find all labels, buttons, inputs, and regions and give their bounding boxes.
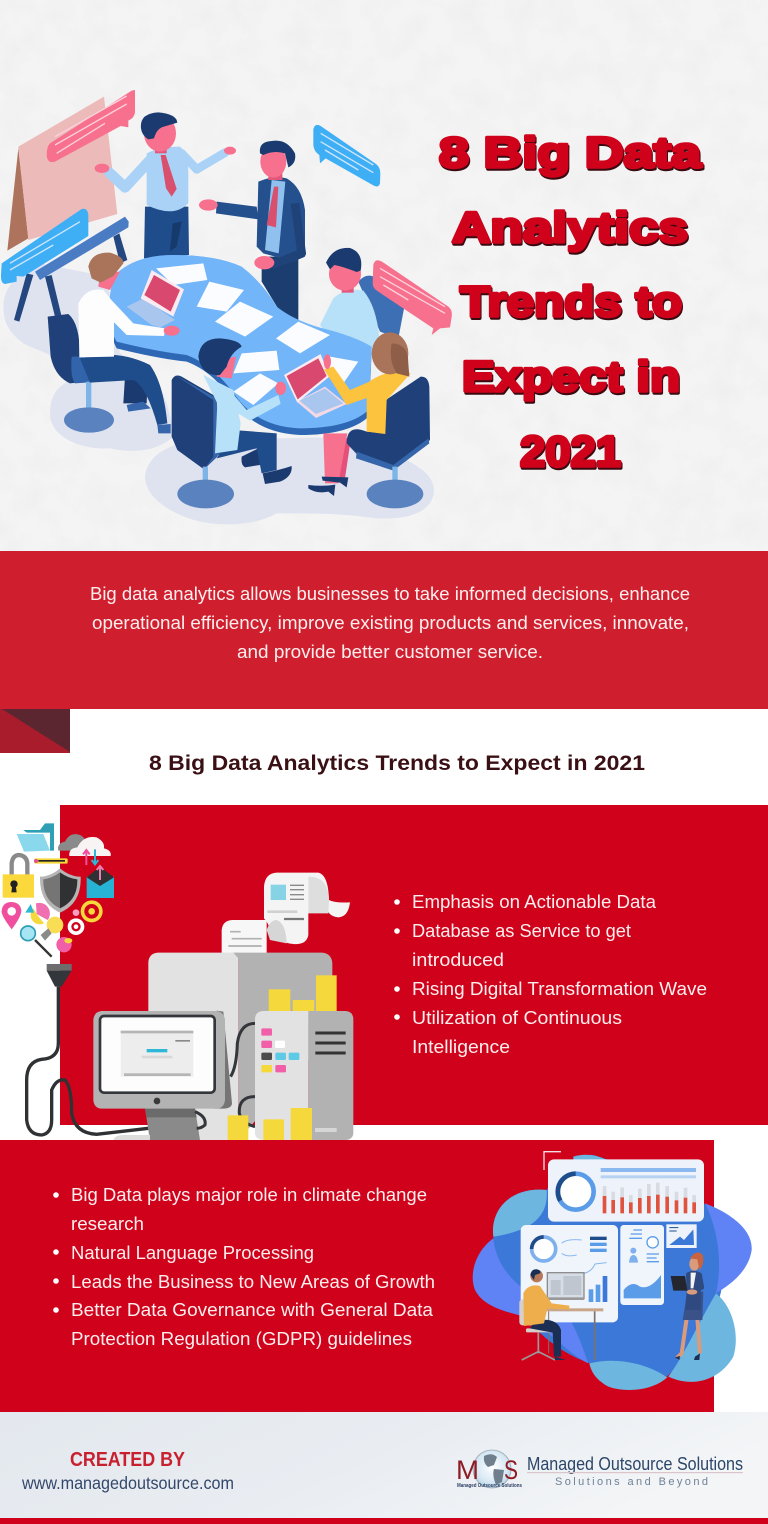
dashboard: top with donut and bars — [548, 1159, 704, 1222]
coin stacks: bottom — [228, 1108, 312, 1140]
intro text: and provide better customer service. — [237, 641, 543, 662]
paper rolls — [222, 873, 350, 953]
bullet list: first four trends — [394, 891, 707, 1057]
icon: envelope — [87, 866, 114, 898]
logo: Managed Outsource Solutions: Solutions and Beyond — [555, 1476, 708, 1488]
panel: hero — [0, 0, 768, 551]
dashboard: tall with area chart — [620, 1225, 664, 1305]
server tower — [148, 953, 332, 1140]
created by credit: CREATED BY — [70, 1449, 186, 1471]
cables behind tower — [195, 1023, 255, 1128]
speech bubble: pink right — [373, 260, 452, 335]
bullet list: first four trends: Database as Service to get — [412, 920, 631, 941]
speech bubble: pink top — [47, 90, 135, 162]
flipchart — [7, 97, 117, 251]
icon: pencil — [34, 858, 68, 864]
dashboard: left with donut — [521, 1225, 618, 1322]
intro text — [90, 583, 690, 662]
person: woman in yellow — [308, 332, 430, 508]
bullet list: first four trends: Rising Digital Transformation Wave — [412, 978, 707, 999]
floor shadows — [3, 263, 434, 524]
bullet list: first four trends: introduced — [412, 949, 504, 970]
bullet list: first four trends: Intelligence — [412, 1036, 510, 1057]
cable and funnel — [27, 964, 148, 1135]
illustration: dashboards on blue blobs — [473, 1152, 752, 1390]
corner bracket — [544, 1152, 561, 1170]
icon: shield — [40, 868, 81, 913]
speech bubble: blue top — [313, 125, 380, 186]
person: standing man with tie — [95, 112, 236, 258]
monitor stand — [113, 1108, 200, 1140]
person: man at desk — [519, 1269, 603, 1360]
bullet list: last four trends: Big Data plays major role in climate change — [71, 1184, 427, 1205]
title: Expect in — [462, 353, 680, 401]
decorative corner block — [0, 709, 70, 753]
papers on table — [156, 263, 358, 405]
laptop: right — [284, 354, 347, 418]
icon: map pin — [2, 902, 21, 929]
bullet list: last four trends: research — [71, 1213, 144, 1234]
icon: pie chart — [25, 903, 50, 924]
bullet list: last four trends — [53, 1184, 435, 1349]
icon: padlock — [3, 855, 34, 898]
created by credit: www.managedoutsource.com — [21, 1473, 234, 1493]
intro text: Big data analytics allows businesses to take informed decisions, enhance — [90, 583, 690, 604]
bullet list: first four trends: Utilization of Continuous — [412, 1007, 622, 1028]
panel: intro band — [0, 551, 768, 709]
title: 8 Big Data — [439, 129, 702, 177]
section heading: 8 Big Data Analytics Trends to Expect in 2021 — [149, 752, 645, 775]
icon: clouds — [58, 834, 111, 865]
bullet list: last four trends: Protection Regulation (GDPR) guidelines — [71, 1328, 412, 1349]
icon: target rings — [56, 900, 103, 952]
logo: Managed Outsource Solutions: S — [504, 1455, 518, 1485]
title — [439, 129, 702, 476]
person: seated man, left — [48, 253, 180, 433]
background blobs — [473, 1155, 752, 1390]
title: Analytics — [452, 204, 688, 252]
monitor — [93, 1011, 232, 1109]
bullet list: last four trends: Natural Language Processing — [71, 1242, 314, 1263]
illustration: team meeting around a table — [1, 90, 452, 524]
illustration: server, monitor and data icons — [27, 873, 353, 1140]
person: woman in pale blue — [320, 248, 405, 350]
icon: folder — [17, 823, 54, 852]
title: 2021 — [520, 428, 621, 476]
table — [109, 255, 372, 435]
panel: trends 1-4 — [2, 805, 768, 1140]
created by credit — [21, 1449, 234, 1493]
coin stacks: top — [269, 975, 337, 1013]
logo: Managed Outsource Solutions — [456, 1450, 743, 1489]
bullet list: last four trends: Better Data Governance with General Data — [71, 1299, 434, 1320]
person: woman with tablet — [671, 1252, 704, 1360]
person: seated man, front — [172, 338, 292, 508]
person: standing man in suit — [199, 141, 305, 321]
bench — [14, 217, 129, 322]
speech bubble: blue left — [1, 209, 88, 284]
laptop: left — [127, 270, 184, 327]
logo: Managed Outsource Solutions: Managed Outsource Solutions — [527, 1454, 743, 1474]
bullet list: last four trends: Leads the Business to New Areas of Growth — [71, 1271, 435, 1292]
logo: Managed Outsource Solutions: Managed Outsource Solutions — [457, 1483, 522, 1489]
dashboard: small line chart — [666, 1224, 697, 1248]
data icons above funnel — [2, 823, 114, 957]
logo: Managed Outsource Solutions: M — [456, 1455, 479, 1485]
title: Trends to — [460, 278, 682, 326]
panel: footer — [0, 1412, 768, 1524]
intro text: operational efficiency, improve existing products and services, innovate, — [92, 612, 689, 633]
control unit — [255, 1011, 353, 1140]
icon: magnifier — [21, 926, 52, 957]
icon: light bulb — [41, 917, 63, 941]
bullet list: first four trends: Emphasis on Actionable Data — [412, 891, 657, 912]
panel: trends 5-8 — [0, 1140, 752, 1412]
